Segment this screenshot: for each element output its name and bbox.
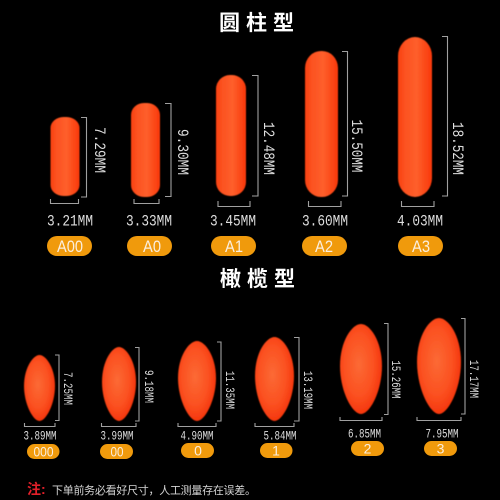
- height label: 15.26MM: [388, 360, 403, 398]
- height bracket: [461, 318, 465, 414]
- width bracket: [255, 423, 294, 426]
- title: olive type: 橄榄型: [220, 268, 301, 291]
- item 00: [100, 347, 156, 460]
- width bracket: [102, 423, 136, 426]
- item A00: [47, 117, 108, 256]
- width label: 5.84MM: [264, 428, 296, 444]
- item A3: [397, 36, 466, 256]
- height bracket: [252, 76, 258, 196]
- height label: 12.48MM: [259, 122, 277, 175]
- size badge: [302, 236, 347, 256]
- size badge: [27, 444, 60, 459]
- float A3: [398, 37, 432, 197]
- height label: 15.50MM: [347, 120, 365, 172]
- badge text: 1: [272, 442, 280, 458]
- float A0: [131, 103, 160, 197]
- float 000: [24, 355, 55, 421]
- height bracket: [135, 348, 139, 421]
- height label: 18.52MM: [448, 122, 466, 175]
- item A0: [126, 103, 191, 256]
- float A1: [216, 75, 246, 196]
- height bracket: [294, 338, 299, 421]
- height bracket: [55, 355, 59, 420]
- badge text: 3: [437, 440, 445, 456]
- width label: 7.95MM: [426, 426, 458, 442]
- title: cylinder type: 圆柱型: [219, 12, 300, 35]
- width label: 3.21MM: [47, 212, 93, 230]
- badge text: A00: [57, 237, 83, 256]
- height label: 11.35MM: [222, 371, 237, 409]
- item 1: [255, 337, 315, 458]
- item 3: [417, 318, 481, 456]
- badge text: A1: [225, 237, 243, 256]
- float 0: [178, 341, 216, 421]
- width bracket: [24, 423, 55, 426]
- size badge: [211, 236, 256, 256]
- width bracket: [50, 199, 78, 204]
- height label: 7.25MM: [60, 372, 75, 405]
- width label: 3.60MM: [302, 212, 348, 230]
- item 2: [340, 324, 403, 456]
- width bracket: [178, 423, 216, 426]
- height bracket: [342, 52, 348, 196]
- width label: 6.85MM: [348, 426, 381, 442]
- item 0: [178, 341, 237, 458]
- float A00: [50, 117, 80, 196]
- size badge: [127, 236, 172, 256]
- width bracket: [402, 201, 434, 206]
- width bracket: [134, 199, 159, 204]
- size badge: [398, 236, 443, 256]
- height bracket: [442, 36, 448, 196]
- size badge: [181, 443, 214, 458]
- width label: 3.33MM: [126, 212, 172, 230]
- float A2: [305, 51, 338, 197]
- badge text: 2: [364, 440, 372, 456]
- width bracket: [340, 417, 382, 420]
- size badge: [424, 441, 457, 456]
- badge text: A2: [315, 237, 333, 256]
- badge text: A3: [412, 237, 430, 256]
- width bracket: [218, 201, 250, 206]
- width label: 3.89MM: [24, 428, 56, 444]
- size badge: [260, 443, 292, 458]
- width bracket: [308, 201, 341, 206]
- item A1: [210, 75, 277, 256]
- height bracket: [217, 342, 221, 421]
- badge text: 00: [110, 444, 124, 460]
- note label: 注:: [27, 481, 46, 497]
- height label: 17.17MM: [466, 360, 481, 398]
- item A2: [302, 51, 365, 256]
- badge text: 0: [194, 442, 202, 458]
- width label: 4.03MM: [397, 212, 443, 230]
- height label: 13.19MM: [300, 371, 315, 409]
- width bracket: [417, 417, 461, 420]
- note text: 下单前务必看好尺寸，人工测量存在误差。: [52, 483, 256, 497]
- width label: 3.45MM: [210, 212, 256, 230]
- size badge: [47, 236, 92, 256]
- size badge: [100, 444, 133, 459]
- float 3: [417, 318, 461, 414]
- float 1: [255, 337, 294, 421]
- height bracket: [165, 104, 171, 196]
- height bracket: [81, 118, 86, 197]
- height label: 9.18MM: [141, 370, 156, 403]
- float 2: [340, 324, 382, 414]
- badge text: A0: [143, 237, 161, 256]
- width label: 4.90MM: [180, 428, 214, 444]
- height label: 7.29MM: [90, 127, 108, 173]
- width label: 3.99MM: [100, 428, 134, 444]
- size badge: [351, 441, 384, 456]
- height label: 9.30MM: [173, 129, 191, 175]
- item 000: [24, 355, 75, 460]
- float 00: [102, 347, 136, 421]
- height bracket: [384, 324, 388, 414]
- badge text: 000: [34, 444, 54, 460]
